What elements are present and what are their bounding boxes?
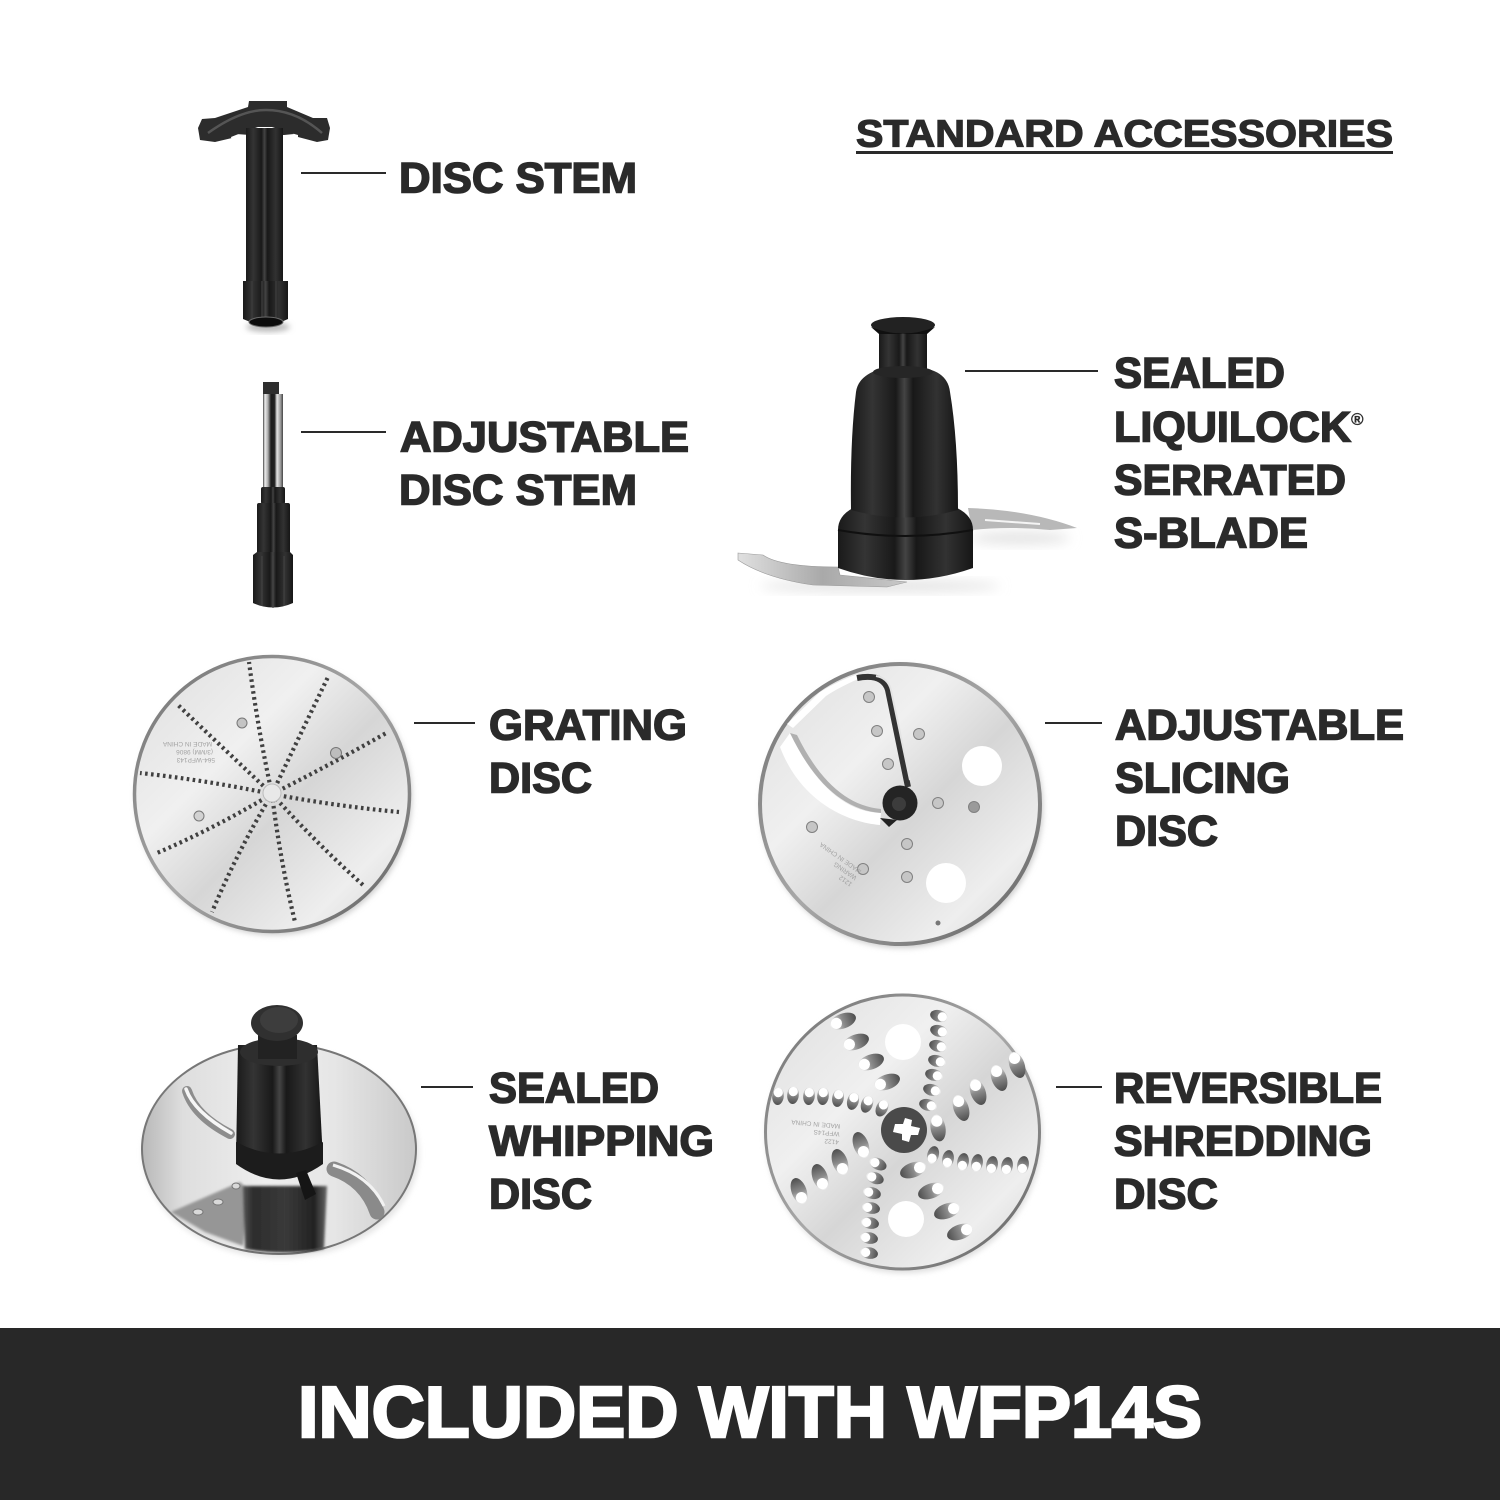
- label: sealed whipping disc: WHIPPING: [489, 1118, 714, 1166]
- label: sealed whipping disc: [489, 1066, 714, 1218]
- label: adjustable slicing disc: SLICING: [1115, 756, 1290, 802]
- leader line: sealed whipping disc: [421, 1086, 473, 1088]
- label: sealed whipping disc: SEALED: [489, 1066, 659, 1112]
- label: reversible shredding disc: DISC: [1114, 1172, 1218, 1218]
- label: grating disc: [489, 702, 687, 802]
- leader line: adjustable slicing disc: [1045, 722, 1102, 724]
- label: adjustable slicing disc: ADJUSTABLE: [1115, 702, 1404, 750]
- label: s-blade: LIQUILOCK: [1114, 404, 1351, 452]
- label: s-blade: S-BLADE: [1114, 510, 1308, 558]
- icon: reversible shredding disc: [766, 995, 1042, 1273]
- label: grating disc: DISC: [489, 756, 592, 802]
- icon: grating disc: [134, 656, 412, 935]
- label: reversible shredding disc: SHREDDING: [1114, 1118, 1372, 1166]
- icon: grating disc: (3/MM) 9806: [176, 748, 213, 755]
- icon: adjustable slicing disc: [760, 664, 1043, 948]
- icon: reversible shredding disc: MADE IN CHINA: [790, 1118, 841, 1129]
- label: reversible shredding disc: [1114, 1066, 1382, 1218]
- icon: adjustable slicing disc: WARING: [833, 860, 858, 881]
- label: reversible shredding disc: REVERSIBLE: [1114, 1066, 1382, 1112]
- label: sealed whipping disc: DISC: [489, 1172, 592, 1218]
- leader line: s-blade: [965, 370, 1098, 372]
- icon: adjustable slicing disc: MADE IN CHINA: [818, 840, 863, 874]
- footer banner: INCLUDED WITH WFP14S: [298, 1373, 1202, 1453]
- spokes: [771, 1008, 1030, 1260]
- icon: sealed whipping disc: [142, 1005, 419, 1258]
- label: adjustable slicing disc: DISC: [1115, 808, 1218, 856]
- label: grating disc: GRATING: [489, 702, 687, 750]
- icon: disc stem: [198, 101, 330, 332]
- leader line: reversible shredding disc: [1056, 1086, 1102, 1088]
- icon: grating disc: 564-WFP143: [176, 756, 215, 763]
- label: adjustable slicing disc: [1115, 702, 1404, 856]
- icon: grating disc: MADE IN CHINA: [162, 740, 212, 747]
- leader line: adjustable disc stem: [301, 431, 386, 433]
- leader line: grating disc: [414, 722, 475, 724]
- heading: standard accessories: STANDARD ACCESSORIES: [856, 114, 1393, 156]
- label: adjustable disc stem: ADJUSTABLE: [400, 414, 689, 462]
- label: disc stem: DISC STEM: [399, 156, 637, 202]
- label: adjustable disc stem: DISC STEM: [399, 468, 637, 514]
- footer banner: [0, 1328, 1500, 1500]
- label: s-blade: ®: [1351, 410, 1364, 429]
- leader line: disc stem: [301, 172, 386, 174]
- icon: reversible shredding disc: WFP14S: [813, 1128, 840, 1137]
- label: adjustable disc stem: [399, 414, 689, 514]
- label: s-blade: SEALED: [1114, 350, 1285, 398]
- icon: adjustable disc stem: [253, 382, 293, 608]
- label: s-blade: SERRATED: [1114, 458, 1346, 504]
- icon: adjustable slicing disc: 1212: [838, 873, 854, 888]
- icon: reversible shredding disc: 4122: [824, 1137, 839, 1145]
- label: s-blade: [1114, 350, 1364, 558]
- icon: s-blade: [738, 317, 1077, 591]
